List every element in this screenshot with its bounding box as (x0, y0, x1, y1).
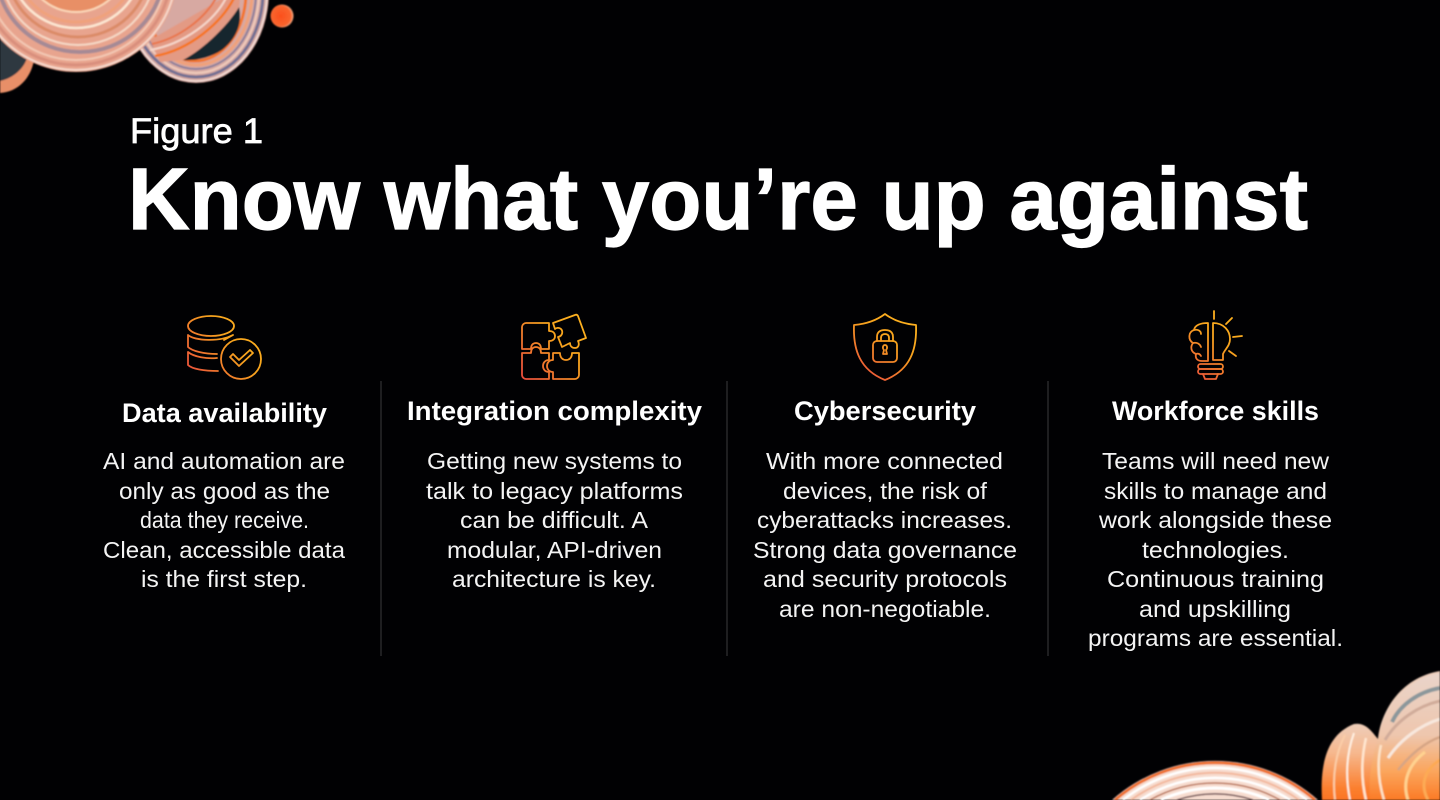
text: workforce skills description: technologies. (1142, 537, 1289, 563)
heading: integration complexity: Integration complexity (407, 396, 702, 426)
panel: cybersecurity (753, 314, 1017, 622)
text: data availability description: AI and automation are (103, 448, 345, 474)
text: workforce skills description: and upskilling (1139, 596, 1291, 622)
text: data availability description: Clean, accessible data (103, 537, 346, 563)
text: integration complexity description: can be difficult. A (460, 507, 648, 533)
text: cybersecurity description: cyberattacks increases. (757, 507, 1012, 533)
text: cybersecurity description: and security protocols (763, 566, 1007, 592)
decoration: bottom-right swirls (1112, 671, 1440, 800)
text: data availability description: only as good as the (119, 478, 330, 504)
panel: integration complexity (407, 315, 702, 592)
icon: shield with lock (854, 314, 916, 380)
panel: workforce skills (1088, 311, 1343, 651)
text: cybersecurity description: With more connected (766, 448, 1003, 474)
icon: brain lightbulb (1189, 311, 1242, 379)
text: integration complexity description: Getting new systems to (427, 448, 682, 474)
text: data availability description: is the first step. (141, 566, 307, 592)
text: workforce skills description: Continuous training (1107, 566, 1324, 592)
icon: database with check (188, 316, 261, 379)
decoration: top-left swirls (0, 0, 294, 93)
icon: orange dot (270, 4, 294, 28)
eyebrow: Figure 1: Figure 1 (130, 112, 263, 151)
text: cybersecurity description: are non-negotiable. (779, 596, 991, 622)
dark crescent (183, 7, 240, 60)
text: workforce skills description: Teams will need new (1102, 448, 1330, 474)
text: data availability description (103, 448, 346, 592)
text: integration complexity description: talk to legacy platforms (426, 478, 683, 504)
heading: cybersecurity: Cybersecurity (794, 396, 976, 426)
title: Know what you’re up against (128, 151, 1308, 248)
panel: data availability (103, 316, 346, 592)
text: cybersecurity description: devices, the risk of (783, 478, 987, 504)
text: data availability description: data they receive. (140, 507, 309, 533)
text: integration complexity description: modular, API-driven (447, 537, 662, 563)
text: cybersecurity description (753, 448, 1017, 622)
icon: puzzle pieces (522, 315, 586, 379)
text: workforce skills description: work alongside these (1098, 507, 1332, 533)
text: workforce skills description: programs are essential. (1088, 625, 1343, 651)
heading: workforce skills: Workforce skills (1112, 396, 1319, 426)
text: workforce skills description (1088, 448, 1343, 651)
text: integration complexity description: architecture is key. (452, 566, 656, 592)
heading: data availability: Data availability (122, 398, 327, 428)
text: cybersecurity description: Strong data governance (753, 537, 1017, 563)
text: integration complexity description (426, 448, 683, 592)
text: workforce skills description: skills to manage and (1104, 478, 1327, 504)
